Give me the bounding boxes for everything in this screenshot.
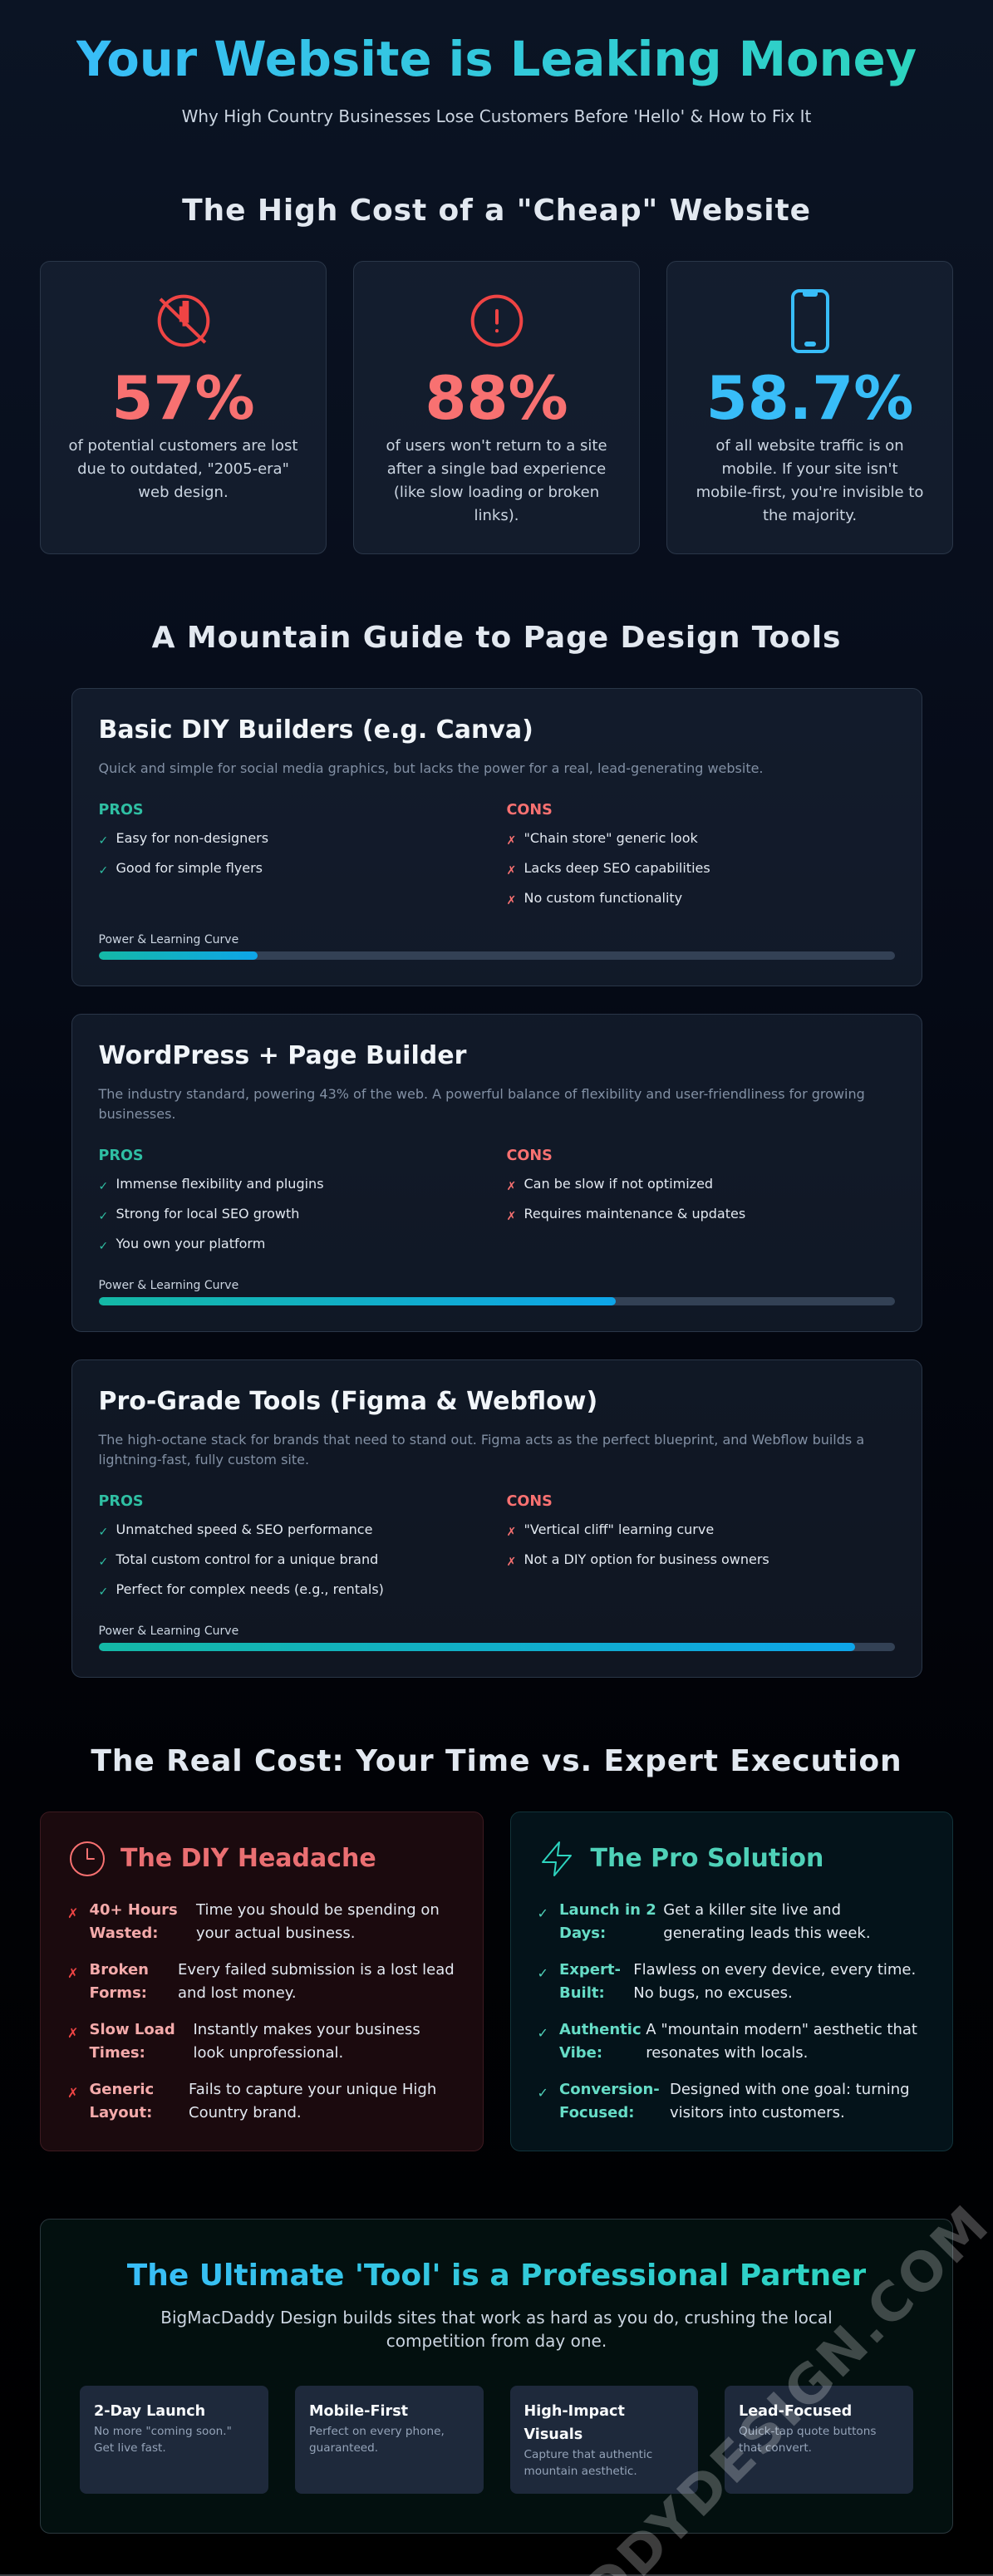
pros and cons: ✗ [507,1180,516,1193]
pros and cons: ✓ [98,1240,108,1253]
pros and cons: ✗ [507,894,516,907]
icon: clock [70,1841,105,1876]
feature: high-impact visuals: High-Impact Visuals [524,2403,625,2443]
pros and cons: Total custom control for a unique brand [116,1551,378,1567]
list of problems: Generic Layout: [90,2081,154,2121]
stat description: of potential customers are lost due to outdated, "2005-era" web design. [68,437,297,501]
heading: real cost: The Real Cost: Your Time vs. Expert Execution [91,1744,902,1778]
icon: alert circle [470,294,524,347]
list of problems: ✗ [67,1965,78,1981]
panel: WordPress + page builder [71,1014,922,1332]
list of benefits: Flawless on every device, every time. [633,1961,916,1979]
list of benefits: Conversion-Focused: [559,2081,660,2121]
list of benefits: A "mountain modern" aesthetic that [646,2021,917,2038]
pros and cons: PROS [98,1148,144,1164]
power meter: Power & Learning Curve [98,933,238,946]
stat number: 88% [425,363,568,433]
list of problems: Country brand. [189,2104,302,2121]
tool description: Quick and simple for social media graphics, but lacks the power for a real, lead-generating website. [98,760,764,776]
list of problems: Broken Forms: [90,1961,149,2002]
list of problems: Time you should be spending on [196,1901,440,1919]
list of benefits: ✓ [537,2025,548,2041]
heading: mountain guide: A Mountain Guide to Page Design Tools [152,621,841,655]
list of problems [67,1901,455,2121]
pros and cons: ✓ [98,864,108,878]
pros and cons: Strong for local SEO growth [116,1206,299,1222]
icon: lightning bolt [542,1841,572,1876]
list of problems: Slow Load Times: [90,2021,175,2062]
pros and cons: CONS [507,1493,553,1510]
pros and cons: Not a DIY option for business owners [524,1551,769,1567]
stat number: 57% [111,363,255,433]
panel: basic DIY builders [71,688,922,986]
feature: mobile-first: Mobile-First [309,2403,408,2420]
power meter [98,1625,895,1651]
list of problems: ✗ [67,2085,78,2101]
pros and cons [98,1493,769,1599]
list of benefits: ✓ [537,1905,548,1921]
panel: pro-grade tools [71,1359,922,1678]
pros and cons: No custom functionality [524,890,682,906]
title: Your Website is Leaking Money [76,32,917,87]
feature: 2-day launch: No more "coming soon." Get live fast. [94,2425,232,2455]
pros and cons: Immense flexibility and plugins [116,1176,324,1192]
subtitle: Why High Country Businesses Lose Customers Before 'Hello' & How to Fix It [182,106,811,126]
pros and cons: Good for simple flyers [116,860,263,876]
bottom edge line [0,2574,993,2576]
panel: the pro solution [510,1812,953,2151]
tool name: WordPress + Page Builder [98,1041,466,1070]
tool name: Pro-Grade Tools (Figma & Webflow) [98,1387,597,1416]
pros and cons: PROS [98,802,144,819]
feature: mobile-first: Perfect on every phone, guaranteed. [309,2425,445,2455]
panel: stat 58.7% [666,261,953,554]
panel: stat 88% [353,261,640,554]
pros and cons: ✗ [507,834,516,848]
pros and cons: ✗ [507,1526,516,1539]
pros and cons: CONS [507,1148,553,1164]
pros and cons [98,1148,745,1253]
pros and cons: ✗ [507,1210,516,1223]
pros and cons: Requires maintenance & updates [524,1206,745,1222]
feature: high-impact visuals [510,2386,698,2494]
pros and cons: Perfect for complex needs (e.g., rentals) [116,1581,384,1597]
list of problems: ✗ [67,2025,78,2041]
panel: stat 57% [40,261,327,554]
pros and cons [98,802,710,907]
list of benefits: Designed with one goal: turning [670,2081,910,2098]
pros and cons: CONS [507,802,553,819]
list of benefits: resonates with locals. [646,2044,808,2062]
list of benefits: ✓ [537,1965,548,1981]
power meter [98,1279,895,1305]
list of benefits: No bugs, no excuses. [633,1984,793,2002]
feature: lead-focused [725,2386,913,2494]
list of problems: Instantly makes your business [193,2021,420,2038]
power meter [98,933,895,960]
feature: lead-focused: Quick-tap quote buttons that convert. [739,2425,876,2455]
stat number: 58.7% [706,363,913,433]
pros and cons: PROS [98,1493,144,1510]
panel heading [542,1841,823,1876]
list of problems: ✗ [67,1905,78,1921]
stat description: of all website traffic is on mobile. If your site isn't mobile-first, you're invisible to the majority. [696,437,923,524]
power meter: Power & Learning Curve [98,1625,238,1638]
tool description: The industry standard, powering 43% of the web. A powerful balance of flexibility and user-friendliness for growing businesses. [98,1086,865,1122]
pros and cons: ✓ [98,1180,108,1193]
list of benefits: generating leads this week. [663,1925,871,1942]
list of benefits: Get a killer site live and [663,1901,841,1919]
list of benefits: visitors into customers. [670,2104,845,2121]
list of benefits: Authentic Vibe: [559,2021,642,2062]
stat description: of users won't return to a site after a single bad experience (like slow loading or broken links). [386,437,607,524]
list of problems: and lost money. [178,1984,297,2002]
pros and cons: "Chain store" generic look [524,830,698,846]
feature: high-impact visuals: Capture that authentic mountain aesthetic. [524,2448,652,2478]
panel heading: The DIY Headache [120,1844,376,1873]
tool description: The high-octane stack for brands that need to stand out. Figma acts as the perfect blueprint, and Webflow builds a lightning-fast, fully custom site. [98,1432,864,1467]
pros and cons: Easy for non-designers [116,830,268,846]
pros and cons: "Vertical cliff" learning curve [524,1522,714,1537]
panel heading [70,1841,376,1876]
tool name: Basic DIY Builders (e.g. Canva) [98,715,533,745]
feature: lead-focused: Lead-Focused [739,2403,852,2420]
list of benefits: Expert-Built: [559,1961,621,2002]
pros and cons: ✓ [98,1210,108,1223]
pros and cons: Unmatched speed & SEO performance [116,1522,372,1537]
feature: 2-day launch: 2-Day Launch [94,2403,205,2420]
list of benefits: Launch in 2 Days: [559,1901,656,1942]
list of problems: your actual business. [196,1925,356,1942]
pros and cons: ✓ [98,1556,108,1569]
list of problems: look unprofessional. [193,2044,343,2062]
feature: 2-day launch [80,2386,268,2494]
icon: mobile phone [791,289,829,353]
CTA text: BigMacDaddy Design builds sites that work as hard as you do, crushing the local competition from day one. [160,2308,833,2351]
pros and cons: ✓ [98,1526,108,1539]
list of problems: 40+ Hours Wasted: [90,1901,178,1942]
pros and cons: Lacks deep SEO capabilities [524,860,710,876]
pros and cons: Can be slow if not optimized [524,1176,713,1192]
pros and cons: ✗ [507,1556,516,1569]
list of problems: Fails to capture your unique High [189,2081,436,2098]
pros and cons: ✗ [507,864,516,878]
CTA heading: The Ultimate 'Tool' is a Professional Partner [127,2259,866,2293]
feature: mobile-first [295,2386,484,2494]
list of benefits [537,1901,917,2121]
power meter: Power & Learning Curve [98,1279,238,1292]
pros and cons: ✓ [98,834,108,848]
list of benefits: ✓ [537,2085,548,2101]
panel: the DIY headache [40,1812,484,2151]
pros and cons: ✓ [98,1585,108,1599]
panel heading: The Pro Solution [590,1844,823,1873]
heading: high cost: The High Cost of a "Cheap" Website [182,194,811,228]
list of problems: Every failed submission is a lost lead [178,1961,455,1979]
panel: professional partner call to action [40,2219,953,2534]
pros and cons: You own your platform [116,1236,265,1251]
icon: crossed-out clock [158,294,209,347]
